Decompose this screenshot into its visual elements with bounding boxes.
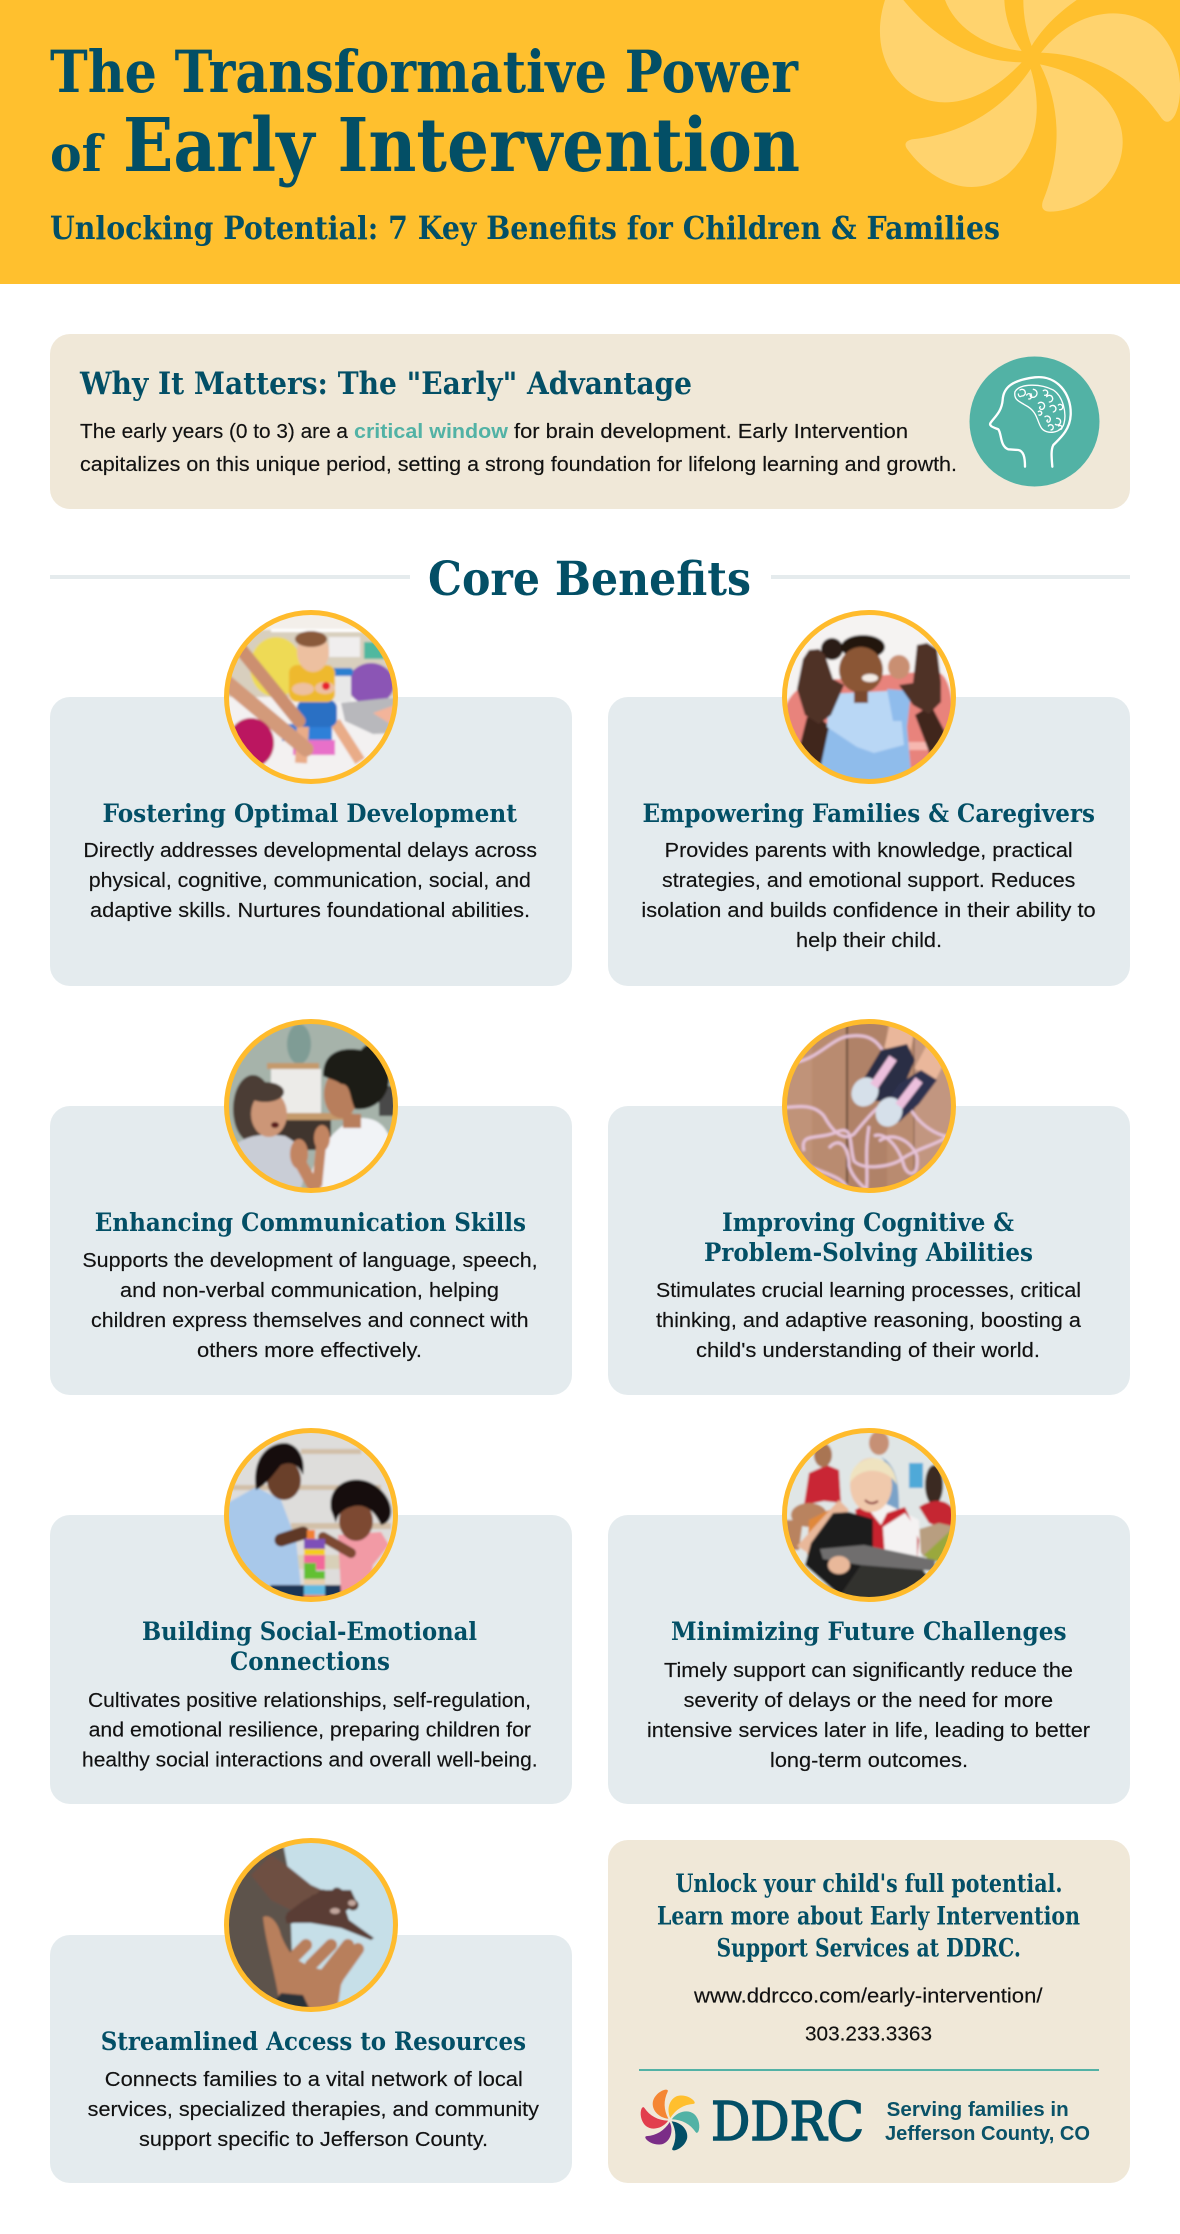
call to action heading: Learn more about Early Intervention [657,1902,1080,1930]
call to action heading: Unlock your child's full potential. [676,1869,1062,1898]
photo: girl high-five [782,610,956,784]
card text: Connects families to a vital network of local [105,2068,523,2091]
panel: communication skills [50,1019,572,1395]
card heading [142,1617,477,1676]
card text [82,1689,538,1772]
card text: isolation and builds confidence in their ability to [641,899,1096,922]
card text [656,1279,1082,1362]
photo: baby in therapy room [224,610,398,784]
service area text: Serving families in [887,2098,1069,2121]
card text [647,1659,1090,1772]
card text: Cultivates positive relationships, self-regulation, [88,1689,531,1712]
card text: healthy social interactions and overall well-being. [82,1748,538,1772]
card text: Directly addresses developmental delays across [83,839,537,862]
card text: physical, cognitive, communication, social, and [89,869,531,892]
card text: Stimulates crucial learning processes, critical [656,1279,1081,1302]
card heading: Empowering Families & Caregivers [642,799,1095,828]
card text [88,2068,540,2151]
card text: thinking, and adaptive reasoning, boosting a [656,1309,1082,1332]
decorative pinwheel [880,0,1180,212]
icon: DDRC pinwheel logo [641,2088,699,2152]
icon: brain in head [970,356,1100,486]
panel: why it matters [50,334,1130,509]
card text: Provides parents with knowledge, practical [665,839,1073,862]
panel text: capitalizes on this unique period, setting a strong foundation for lifelong learning and growth. [80,453,957,476]
card text: child's understanding of their world. [696,1339,1040,1362]
title: of [50,124,105,183]
card text: and emotional resilience, preparing children for [89,1718,531,1742]
panel: call to action [608,1840,1130,2183]
card text: others more effectively. [197,1339,422,1362]
photo: woman and child with blocks [224,1428,398,1602]
card text: Supports the development of language, speech, [82,1249,538,1272]
card text [82,1249,538,1362]
panel text: for brain development. Early Intervention [514,420,908,443]
service area text: Jefferson County, CO [885,2122,1090,2145]
photo: sneakers and laces on wood [782,1019,956,1193]
photo: boy with guitar [782,1428,956,1602]
card heading: Connections [230,1647,390,1676]
panel: minimizing challenges [608,1428,1130,1804]
card heading: Enhancing Communication Skills [95,1208,526,1237]
card heading: Problem-Solving Abilities [704,1238,1033,1267]
card heading: Improving Cognitive & [722,1208,1014,1237]
panel: social-emotional [50,1428,572,1804]
DDRC wordmark: DDRC [711,2092,864,2153]
call to action heading: Support Services at DDRC. [716,1934,1021,1962]
card heading: Fostering Optimal Development [102,799,517,828]
card text: and non-verbal communication, helping [120,1279,499,1302]
panel text: The early years (0 to 3) are a [80,420,349,443]
panel text [80,420,957,476]
panel: fostering optimal development [50,610,572,986]
card text: severity of delays or the need for more [684,1689,1053,1712]
panel: cognitive abilities [608,1019,1130,1395]
card text: Timely support can significantly reduce the [664,1659,1073,1682]
card text: strategies, and emotional support. Reduces [662,869,1075,892]
service area text [885,2098,1090,2145]
section heading: core benefits: Core Benefits [428,552,751,607]
card text: children express themselves and connect with [91,1309,529,1332]
panel heading: Why It Matters: The "Early" Advantage [79,366,692,402]
card text: long-term outcomes. [770,1749,968,1772]
card heading: Building Social-Emotional [142,1617,477,1646]
panel: streamlined access [50,1838,572,2183]
phone number: 303.233.3363 [805,2022,932,2046]
card heading [704,1208,1033,1267]
card text [641,839,1096,952]
title [50,38,800,189]
card heading: Streamlined Access to Resources [101,2027,526,2056]
card text: help their child. [796,929,942,952]
panel: empowering families [608,610,1130,986]
card text [83,839,537,922]
title: The Transformative Power [50,38,799,106]
photo: woman and girl talking [224,1019,399,1193]
card text: services, specialized therapies, and community [88,2098,540,2121]
card heading: Minimizing Future Challenges [671,1617,1066,1646]
photo: reaching hands [224,1838,398,2012]
panel text: critical window [354,420,508,443]
header banner [0,0,1180,284]
website: www.ddrcco.com/early-intervention/ [693,1984,1043,2008]
section heading: core benefits [50,552,1130,607]
title: Early Intervention [123,103,800,189]
card text: intensive services later in life, leading to better [647,1719,1090,1742]
call to action heading [657,1869,1080,1962]
card text: support specific to Jefferson County. [139,2128,488,2151]
card text: adaptive skills. Nurtures foundational abilities. [90,899,530,922]
subtitle: Unlocking Potential: 7 Key Benefits for Children & Families [50,209,1000,247]
